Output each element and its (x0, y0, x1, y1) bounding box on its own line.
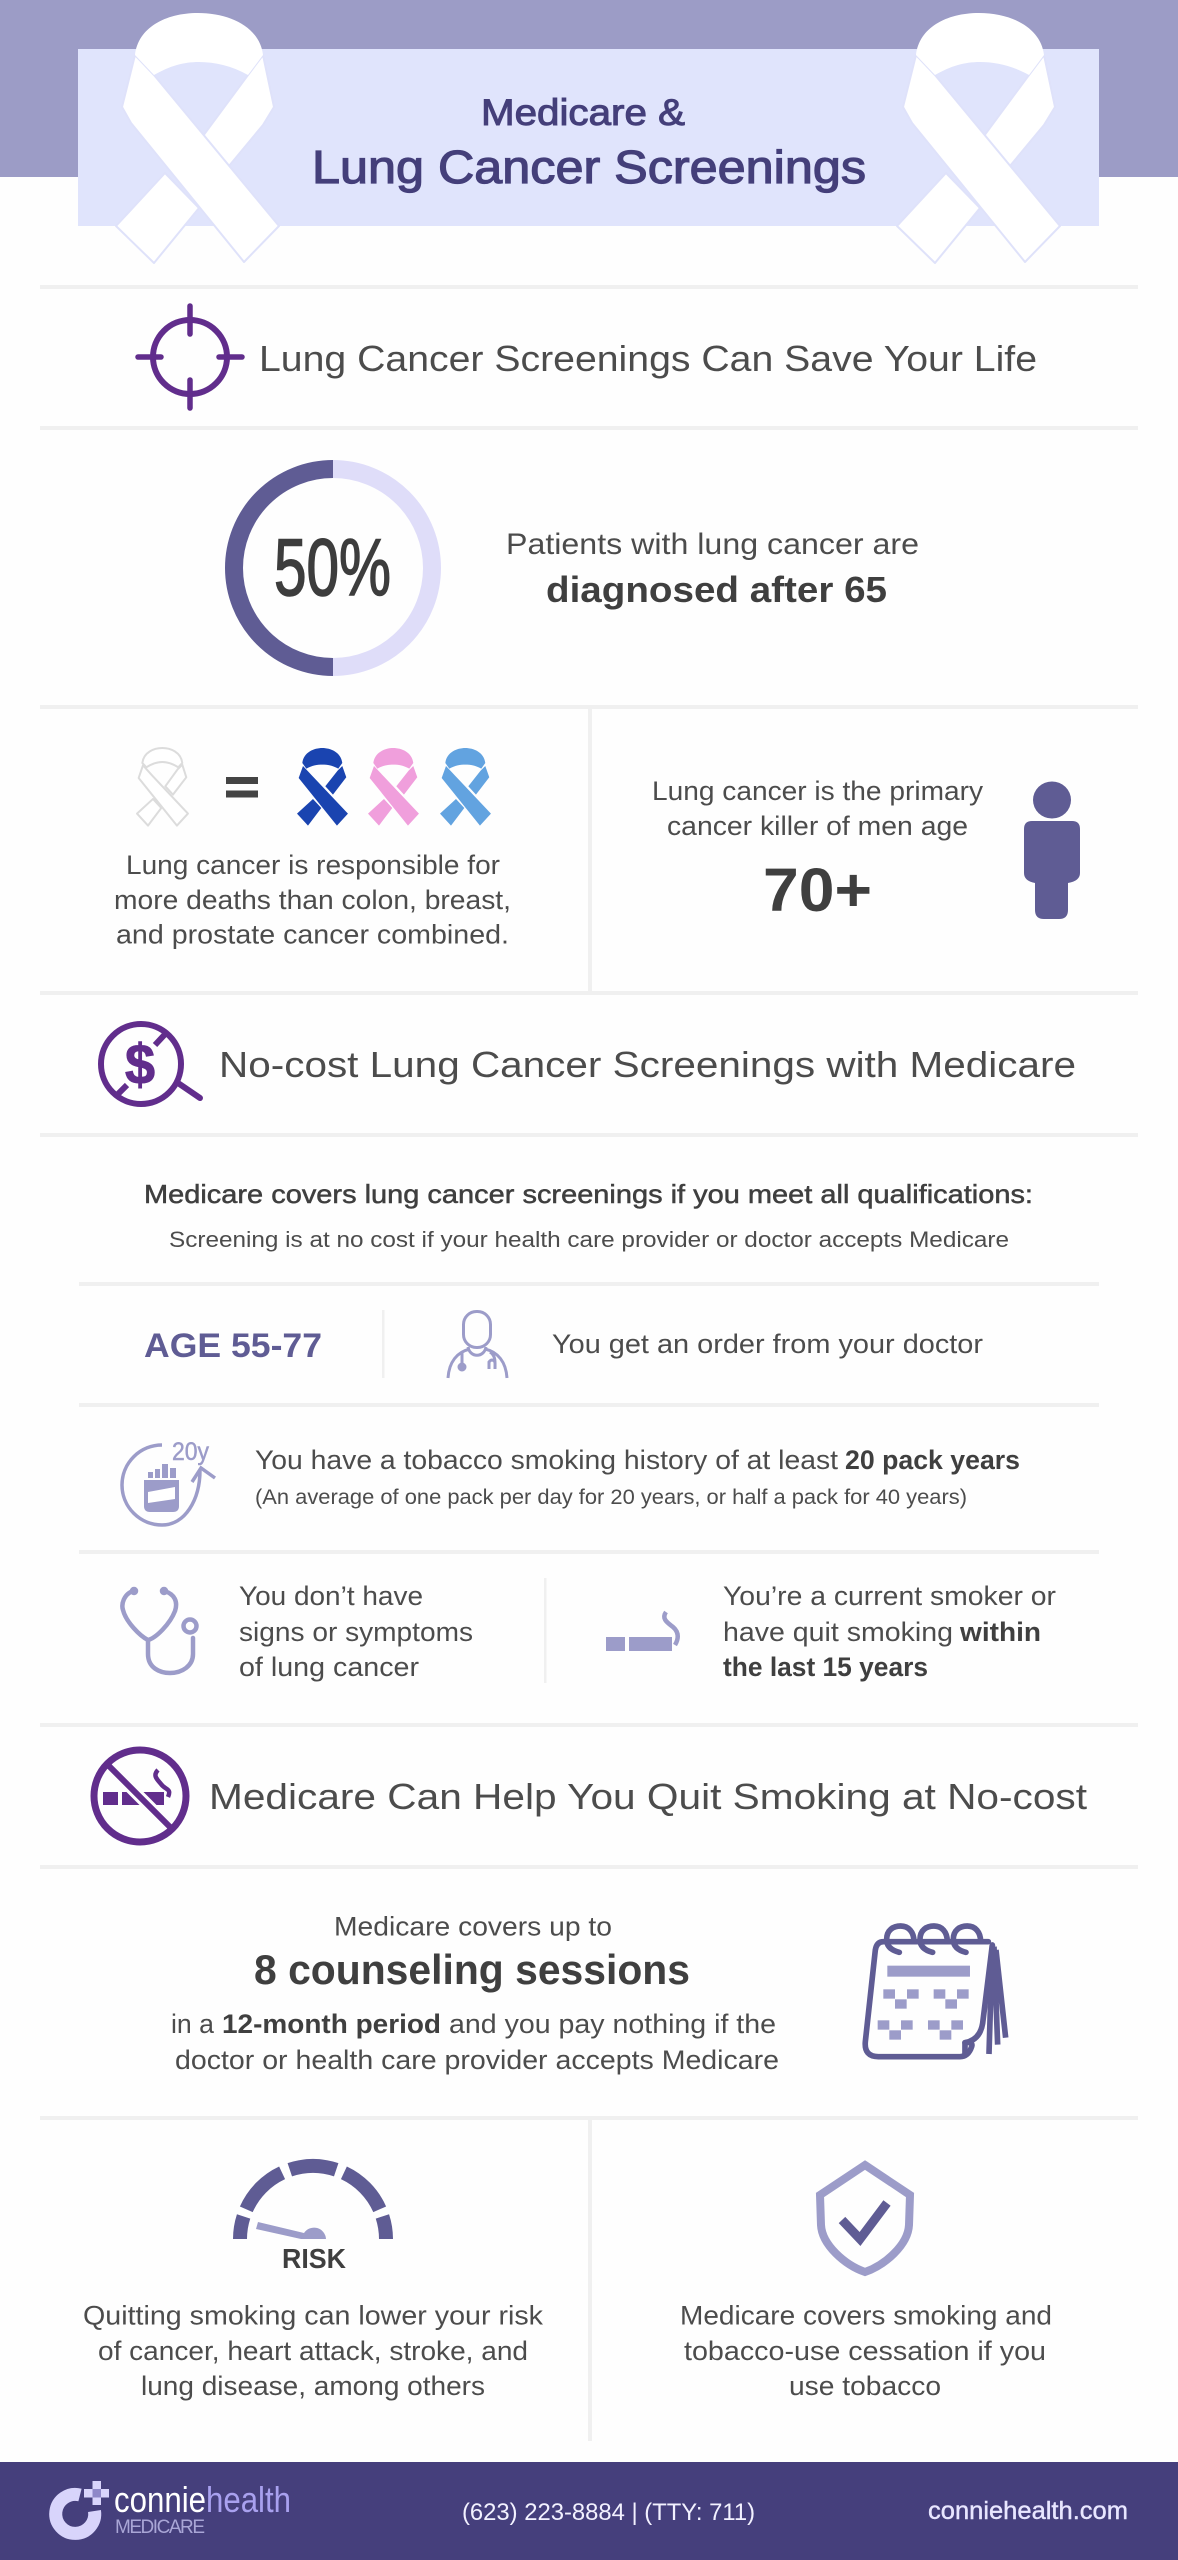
stat text: diagnosed after 65: Patients with lung cancer are (506, 528, 919, 561)
text: pack years requirement: You have a tobacco smoking history of at least (255, 1445, 839, 1475)
text: current smoker: have quit smoking (723, 1617, 953, 1647)
title panel (78, 49, 1099, 226)
title (312, 92, 866, 193)
text: quitting lowers risk (83, 2300, 544, 2401)
text: counseling sessions: and you pay nothing if the (449, 2009, 776, 2039)
text: cessation coverage (680, 2300, 1052, 2401)
text: no symptoms (239, 1581, 473, 1682)
donut chart: 50% (234, 469, 432, 667)
icon: white lung cancer ribbon (137, 748, 188, 826)
text: counseling sessions: Medicare covers up to (334, 1912, 612, 1942)
icon: right awareness ribbon (897, 13, 1060, 263)
footer: MEDICARE (115, 2517, 205, 2538)
logo mark (56, 2481, 109, 2533)
text: no symptoms: signs or symptoms (239, 1617, 473, 1647)
equals sign (226, 777, 258, 798)
icon: no-cost magnifier (101, 1024, 200, 1104)
icon: risk gauge (240, 2166, 386, 2274)
text: cessation coverage: use tobacco (789, 2371, 941, 2401)
text: responsible for more deaths (114, 850, 511, 950)
qualifications intro: Medicare covers lung cancer screenings if you meet all qualifications: (144, 1179, 1033, 1209)
text: pack years requirement (255, 1445, 1020, 1509)
text: counseling sessions: 12-month period (222, 2009, 441, 2039)
stat text: diagnosed after 65: diagnosed after 65 (546, 569, 887, 610)
text: no symptoms: of lung cancer (239, 1652, 419, 1682)
text: primary cancer killer of men 70+: cancer killer of men age (667, 811, 968, 841)
icon: doctor (448, 1312, 507, 1378)
text: current smoker: within (959, 1617, 1041, 1647)
icon: pink ribbon (368, 748, 419, 826)
text: responsible for more deaths: and prostate cancer combined. (116, 920, 509, 950)
text: doctor order: You get an order from your doctor (552, 1329, 983, 1359)
text: primary cancer killer of men 70+: 70+ (763, 856, 872, 924)
age range: AGE 55-77 (144, 1327, 322, 1365)
icon: calendar (865, 1926, 1006, 2057)
text: responsible for more deaths: Lung cancer is responsible for (126, 850, 500, 880)
icon: no-cost magnifier: $ (125, 1033, 155, 1097)
icon: no smoking (94, 1750, 186, 1842)
footer (0, 2462, 1178, 2560)
icon: light blue ribbon (440, 748, 491, 826)
footer: (623) 223-8884 | (TTY: 711) (462, 2499, 755, 2526)
qualifications intro (144, 1179, 1033, 1252)
icon: risk gauge: RISK (282, 2243, 346, 2274)
text: quitting lowers risk: Quitting smoking can lower your risk (83, 2300, 544, 2330)
qualifications intro: Screening is at no cost if your health care provider or doctor accepts Medicare (169, 1227, 1009, 1252)
text: primary cancer killer of men 70+: Lung cancer is the primary (652, 776, 984, 806)
text: counseling sessions: doctor or health care provider accepts Medicare (175, 2045, 779, 2075)
footer: conniehealth.com (928, 2497, 1128, 2525)
icon: left awareness ribbon (116, 13, 279, 263)
text: current smoker: You’re a current smoker or (723, 1581, 1056, 1611)
text: no symptoms: You don’t have (239, 1581, 423, 1611)
icon: person (1024, 782, 1080, 919)
heading: quit smoking: Medicare Can Help You Quit Smoking at No-cost (209, 1776, 1087, 1817)
text: current smoker (723, 1581, 1056, 1682)
heading: save your life: Lung Cancer Screenings Can Save Your Life (259, 338, 1037, 379)
icon: target (138, 306, 242, 408)
icon: stethoscope (122, 1589, 196, 1673)
text: quitting lowers risk: lung disease, among others (141, 2371, 485, 2401)
icon: 20 pack years (122, 1438, 215, 1525)
text: counseling sessions: 8 counseling sessions (254, 1946, 690, 1993)
heading: no-cost screenings: No-cost Lung Cancer Screenings with Medicare (219, 1044, 1076, 1085)
text: responsible for more deaths: more deaths than colon, breast, (114, 885, 511, 915)
text: quitting lowers risk: of cancer, heart attack, stroke, and (98, 2336, 528, 2366)
text: cessation coverage: tobacco-use cessation if you (684, 2336, 1046, 2366)
stat text: diagnosed after 65 (506, 528, 919, 610)
icon: cigarette (606, 1612, 678, 1651)
donut chart: 50%: 50% (274, 523, 391, 613)
icon: 20 pack years: 20y (172, 1438, 209, 1466)
title: Medicare & (481, 92, 685, 133)
icon: blue ribbon (297, 748, 348, 826)
text: counseling sessions: in a (171, 2009, 215, 2039)
text: primary cancer killer of men 70+ (652, 776, 984, 924)
text: pack years requirement: 20 pack years (845, 1445, 1020, 1475)
footer: connie (114, 2479, 206, 2520)
text: current smoker: the last 15 years (723, 1652, 928, 1682)
text: cessation coverage: Medicare covers smoking and (680, 2300, 1052, 2330)
footer: health (206, 2479, 291, 2520)
text: counseling sessions (171, 1912, 779, 2075)
title: Lung Cancer Screenings (312, 141, 866, 193)
text: pack years requirement: (An average of one pack per day for 20 years, or half a pack for 40 years) (255, 1486, 967, 1509)
icon: shield with check (820, 2165, 910, 2272)
header band (0, 0, 1178, 177)
